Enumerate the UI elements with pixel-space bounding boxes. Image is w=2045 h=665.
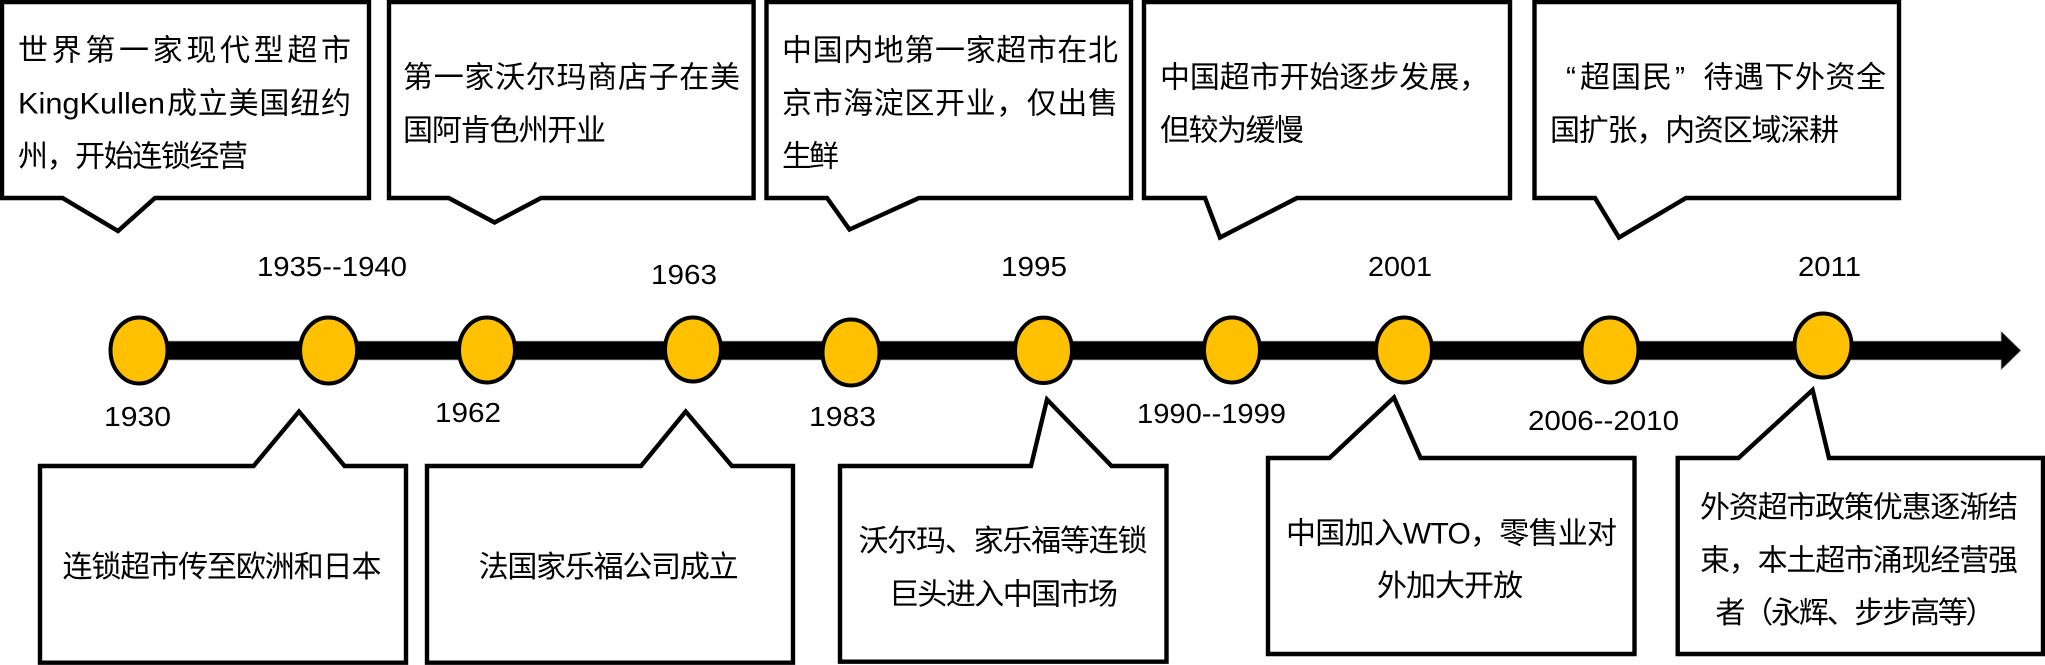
callout: 2001 WTO: 中国加入WTO，零售业对 [1286,518,1617,550]
year label: 2001: 2001 [1368,251,1432,282]
year label: 1995: 1995 [1001,251,1067,282]
callout: 2006-2010 foreign expansion: 超国民 [1580,62,1672,94]
year label: 1962: 1962 [435,397,501,428]
callout: 1935-1940 spread to Europe and Japan: 连锁超市传至欧洲和日本 [62,551,382,584]
timeline node: 1962 [459,318,515,382]
callout: 2006-2010 foreign expansion [1534,2,1899,238]
callout: 1935-1940 spread to Europe and Japan [40,412,406,663]
year label: 1983: 1983 [809,401,876,432]
timeline node: 1963 [665,318,721,382]
callout: 2006-2010 foreign expansion: “ [1566,62,1576,94]
callout: 1930 KingKullen: 世界第一家现代型超市 [18,34,351,68]
callout: 2006-2010 foreign expansion: ” [1675,62,1685,94]
callout: 1930 KingKullen: KingKullen [18,88,165,120]
year label: 2006-2010: 2006--2010 [1528,405,1679,436]
year label: 1935-1940: 1935--1940 [257,251,407,282]
timeline node: 1935-1940 [300,318,357,384]
timeline node: 1930 [110,318,168,384]
year label: 1963: 1963 [651,259,717,290]
callout: 1983 first China supermarket: 中国内地第一家超市在北 [782,34,1118,68]
callout: 1990-1999 slow development: 中国超市开始逐步发展， [1160,62,1489,94]
timeline node: 2011 [1794,314,1852,378]
callout: 1983 first China supermarket: 生鲜 [782,140,839,174]
timeline node: 2006-2010 [1582,318,1638,382]
callout: 1995 giants enter China: 巨头进入中国市场 [889,578,1118,612]
callout: 1995 giants enter China [840,400,1166,662]
callout: 1995 giants enter China: 沃尔玛、家乐福等连锁 [858,525,1148,558]
callout: 1930 KingKullen [2,2,369,231]
callout: 1930 KingKullen: 州，开始连锁经营 [18,140,248,174]
callout: 1962 Walmart: 国阿肯色州开业 [403,114,606,148]
callout: 1990-1999 slow development: 但较为缓慢 [1160,114,1304,148]
callout: 1963 Carrefour founded: 法国家乐福公司成立 [479,551,739,584]
timeline node: 1983 [822,320,880,386]
callout: 2001 WTO: 外加大开放 [1377,570,1523,603]
callout: 2001 WTO [1268,398,1634,654]
callout: 2011 local champions: 束，本土超市涌现经营强 [1700,544,2018,578]
callout: 1962 Walmart [389,2,754,222]
timeline node: 1995 [1015,318,1072,383]
callout: 2006-2010 foreign expansion: 待遇下外资全 [1704,62,1886,94]
callout: 1983 first China supermarket [766,2,1131,230]
callout: 1962 Walmart: 第一家沃尔玛商店子在美 [403,62,740,94]
callout: 2011 local champions: 外资超市政策优惠逐渐结 [1700,492,2018,524]
year label: 1990-1999: 1990--1999 [1137,398,1286,429]
callout: 1990-1999 slow development [1144,2,1510,238]
callout: 2011 local champions: 者（永辉、步步高等） [1716,597,1996,630]
callout: 1963 Carrefour founded [427,412,793,663]
callout: 2011 local champions [1678,390,2043,654]
timeline arrow [130,331,2021,370]
callout: 2006-2010 foreign expansion: 国扩张，内资区域深耕 [1550,114,1839,148]
callout: 1983 first China supermarket: 京市海淀区开业，仅出售 [782,88,1118,120]
year label: 1930: 1930 [104,401,171,432]
callout: 1930 KingKullen: 成立美国纽约 [167,88,351,120]
year label: 2011: 2011 [1798,251,1861,282]
timeline node: 2001 [1376,318,1432,382]
timeline node: 1990-1999 [1204,318,1260,382]
